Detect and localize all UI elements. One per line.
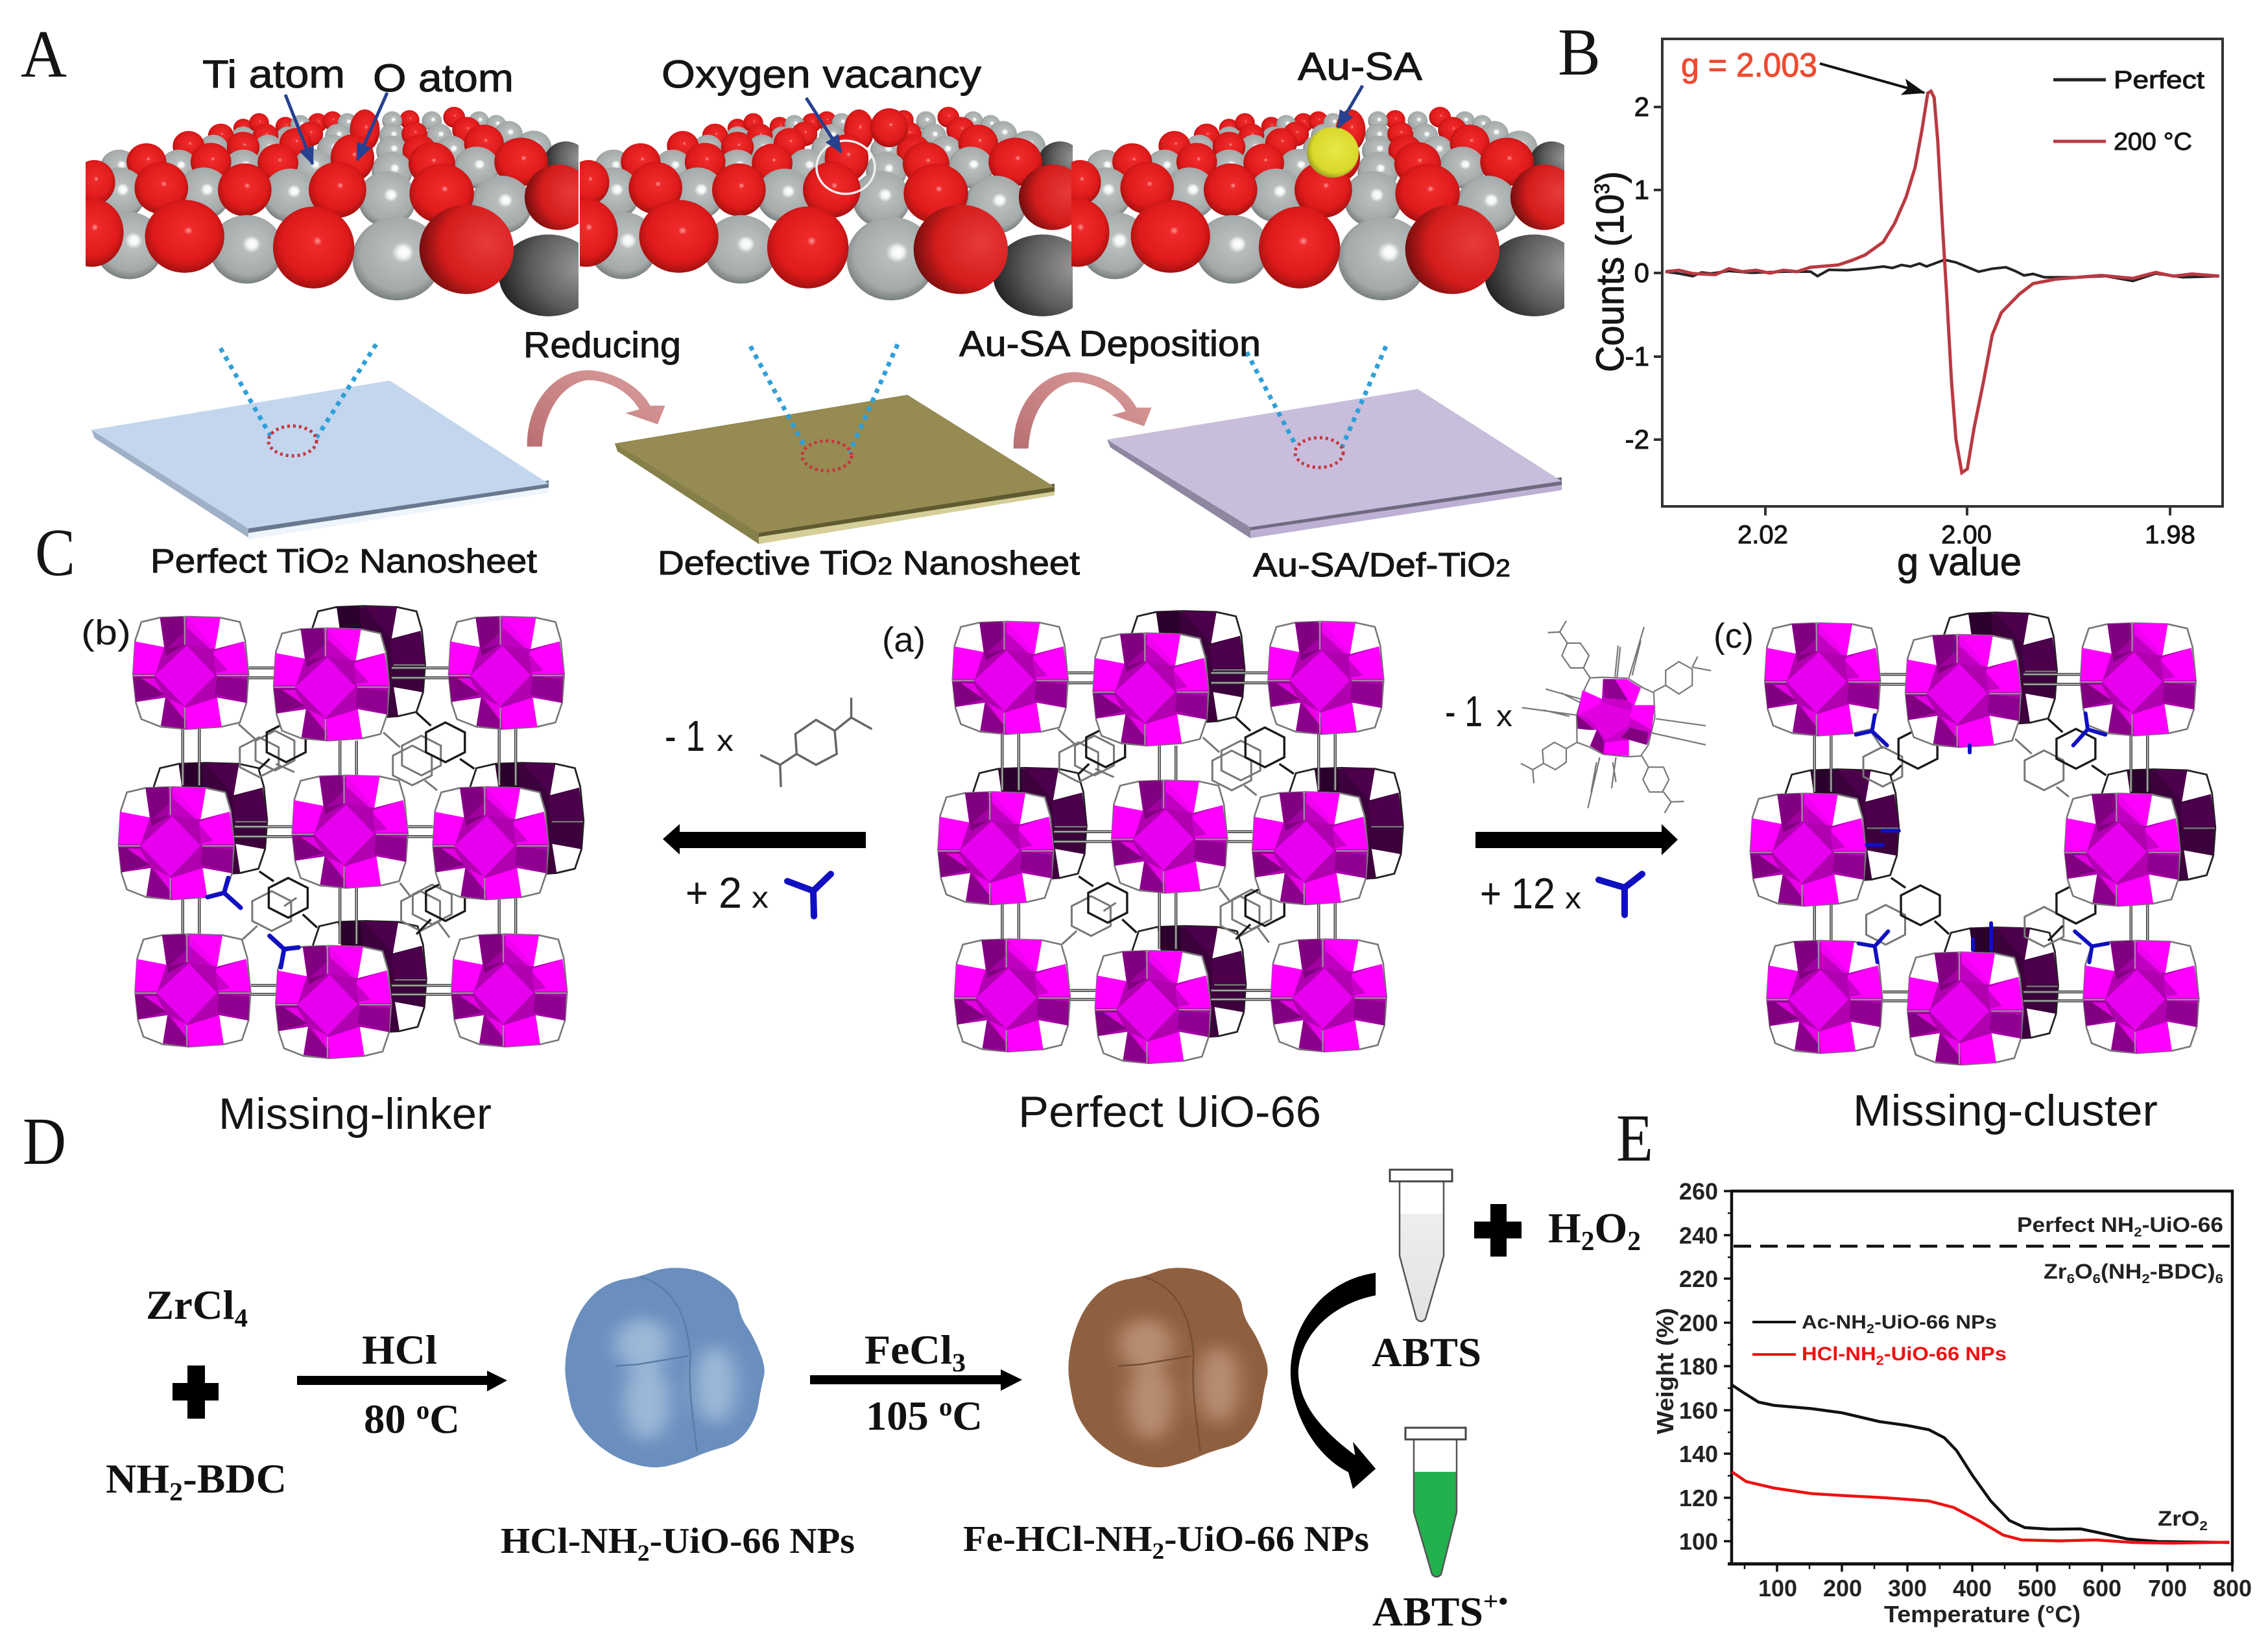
legend: HCl-NH2-UiO-66 NPs: 2 <box>1876 1354 1884 1368</box>
condition: FeCl3: 3 <box>952 1348 966 1377</box>
legend <box>2053 67 2205 156</box>
text: minus one cluster: x <box>1496 699 1512 733</box>
label: Zr6O6(NH2-BDC)6: -BDC) <box>2150 1260 2215 1283</box>
y tick labels: 140 <box>1679 1441 1718 1467</box>
label (a): (a) <box>882 621 925 659</box>
legend: Ac-NH2-UiO-66 NPs: 2 <box>1867 1322 1874 1336</box>
icon: blue modulator <box>1599 874 1642 915</box>
blue linkers in structure (c) <box>1856 713 2108 962</box>
label: Perfect UiO-66: Perfect UiO-66 <box>1018 1087 1321 1137</box>
x axis title: Temperature (°C) <box>1884 1601 2081 1627</box>
gold single atom <box>1307 127 1359 178</box>
legend: HCl-NH2-UiO-66 NPs <box>1752 1343 2007 1368</box>
dotted light cones and defect ellipses <box>221 344 1386 471</box>
label: Zr6O6(NH2-BDC)6: O <box>2075 1260 2093 1283</box>
chart axes and ticks <box>1724 1191 2234 1572</box>
label: Au-SA Deposition: Au-SA Deposition <box>959 323 1261 364</box>
curve: HCl-NH2-UiO-66 <box>1732 1472 2229 1543</box>
reagent: H2O2: 2 <box>1581 1227 1594 1257</box>
panel B: EPR chart <box>1558 15 2223 584</box>
x tick labels <box>1758 1575 2252 1602</box>
x tick labels: 700 <box>2148 1575 2187 1602</box>
y tick labels: 200 <box>1679 1310 1718 1336</box>
icon: single cluster with linkers <box>1521 621 1711 813</box>
y tick labels: 220 <box>1679 1266 1718 1292</box>
reagent: H2O2: H <box>1548 1205 1581 1252</box>
curved arrow: deposition <box>1014 372 1152 449</box>
condition: 105 C: 105 <box>866 1393 927 1439</box>
label: Au-SA: Au-SA <box>1298 45 1422 88</box>
label: Zr6O6(NH2-BDC)6: Zr <box>2044 1260 2064 1283</box>
plus sign <box>173 1365 219 1419</box>
y axis title: Counts (10 <box>1588 182 1632 372</box>
label (b): (b) <box>81 613 131 652</box>
x tick labels: 600 <box>2083 1575 2121 1602</box>
legend: Ac-NH2-UiO-66 NPs: -UiO-66 NPs <box>1874 1312 1997 1333</box>
text: plus twelve modulators: x <box>1565 881 1581 915</box>
label: ABTS: ABTS <box>1372 1330 1481 1375</box>
atom lattice: oxygen vacancy <box>555 107 1092 316</box>
label: Perfect NH2-UiO-66: 2 <box>2134 1225 2142 1240</box>
label: Oxygen vacancy: Oxygen vacancy <box>662 53 981 96</box>
label: Perfect TiO2 Nanosheet: Perfect TiO 2 Nanosheet <box>150 543 538 580</box>
y tick labels: 240 <box>1679 1222 1718 1249</box>
sheet: defective TiO2 <box>615 395 1055 544</box>
curve: 200 C <box>1665 91 2219 473</box>
arrow: to missing-linker <box>663 824 866 855</box>
dashed theoretical line <box>1734 1245 2230 1247</box>
y tick labels: 160 <box>1679 1397 1718 1424</box>
atom lattice: Au single atom <box>1046 107 1584 316</box>
structure (a): perfect UiO-66 <box>938 611 1403 1063</box>
panel A: TiO2 nanosheet atom models and sheets <box>21 17 1584 584</box>
y axis title: ) <box>1588 171 1632 183</box>
x tick labels: 800 <box>2213 1575 2252 1602</box>
label: Missing-linker: Missing-linker <box>219 1089 492 1139</box>
icon: blue modulator <box>787 874 831 916</box>
panel letter B: B <box>1558 15 1601 89</box>
label: Perfect NH2-UiO-66: -UiO-66 <box>2142 1213 2223 1236</box>
y axis title: 3 <box>1590 183 1614 194</box>
y tick labels: 260 <box>1679 1178 1718 1205</box>
annotation: g = 2.003: g = 2.003 <box>1681 47 1817 84</box>
plus sign <box>1474 1204 1522 1257</box>
annotation arrow <box>1820 64 1924 93</box>
condition: FeCl3: FeCl <box>865 1327 948 1373</box>
label: Fe-HCl-NH2-UiO-66 NPs: 2 <box>1152 1538 1164 1564</box>
panel letter D: D <box>23 1104 66 1179</box>
condition: HCl: HCl <box>362 1327 437 1373</box>
text: plus twelve modulators <box>1480 869 1581 918</box>
reagent: NH2-BDC: NH <box>106 1456 167 1502</box>
curved arrow: reducing <box>527 370 665 447</box>
label: Fe-HCl-NH2-UiO-66 NPs: Fe-HCl-NH <box>963 1519 1145 1559</box>
sheet: Au-SA/Def-TiO2 <box>1107 389 1562 538</box>
curve: Perfect <box>1665 260 2219 281</box>
blue replacement linkers <box>208 878 298 967</box>
text: minus one cluster: - 1 <box>1445 687 1483 736</box>
blue arrows to atoms <box>285 86 1363 164</box>
panel E: TGA chart <box>1616 1101 2252 1627</box>
y tick labels: 1 <box>1634 174 1649 205</box>
tube: ABTS <box>1390 1170 1452 1321</box>
y tick labels <box>1679 1178 1718 1555</box>
text: plus twelve modulators: 12 <box>1511 869 1555 918</box>
reagent: H2O2: 2 <box>1627 1227 1641 1257</box>
x tick labels: 2.00 <box>1941 521 1992 549</box>
text: plus two modulators: + <box>686 869 708 917</box>
legend: 200 °C <box>2114 128 2192 156</box>
chart frame and ticks <box>1654 39 2223 515</box>
raised oxygen atom and vacancy ring <box>817 108 908 194</box>
y tick labels: 120 <box>1679 1485 1718 1511</box>
x tick labels: 2.02 <box>1737 521 1788 549</box>
label: Zr6O6(NH2-BDC)6: (NH <box>2101 1260 2142 1283</box>
label: Ti atom: Ti atom <box>202 53 345 96</box>
panel C: UiO-66 defect structures <box>35 515 2215 1139</box>
y tick labels: 180 <box>1679 1353 1718 1380</box>
x tick labels: 300 <box>1888 1575 1927 1602</box>
x tick labels: 500 <box>2018 1575 2057 1602</box>
tube: ABTS radical, green <box>1405 1428 1466 1577</box>
structure (b): missing-linker <box>119 606 584 1058</box>
text: plus two modulators: 2 <box>719 869 742 917</box>
text: minus one linker: x <box>717 724 734 757</box>
legend: HCl-NH2-UiO-66 NPs: HCl-NH <box>1802 1343 1870 1365</box>
reagent: NH2-BDC: 2 <box>169 1477 183 1506</box>
curved catalytic arrow <box>1291 1273 1376 1489</box>
panel letter A: A <box>21 17 67 91</box>
x tick labels: 1.98 <box>2145 521 2195 549</box>
sheet: perfect TiO2 <box>91 381 549 539</box>
label: ZrO2: 2 <box>2199 1519 2208 1533</box>
y tick labels: -2 <box>1625 424 1649 455</box>
reagent: NH2-BDC: -BDC <box>183 1456 287 1502</box>
nanoparticle: brown Fe-HCl-NH2-UiO-66 <box>1068 1268 1268 1467</box>
y tick labels: -1 <box>1625 341 1649 372</box>
y axis title: Weight (%) <box>1652 1308 1678 1434</box>
legend: Ac-NH2-UiO-66 NPs <box>1752 1312 1997 1336</box>
text: plus twelve modulators: + <box>1480 869 1501 918</box>
x axis title: g value <box>1897 540 2022 584</box>
label: Zr6O6(NH2-BDC)6: 6 <box>2067 1272 2075 1286</box>
label: ABTS radical cation: +• <box>1483 1587 1508 1616</box>
condition: 105 C: o <box>939 1392 952 1421</box>
reagent: ZrCl4: ZrCl <box>146 1282 232 1328</box>
legend: HCl-NH2-UiO-66 NPs: -UiO-66 NPs <box>1884 1343 2007 1365</box>
curve: Ac-NH2-UiO-66 <box>1732 1385 2229 1543</box>
label: Zr6O6(NH2-BDC)6: 2 <box>2142 1272 2150 1286</box>
label (c): (c) <box>1713 617 1754 656</box>
y tick labels: 0 <box>1634 257 1649 288</box>
label: HCl-NH2-UiO-66 NPs: -UiO-66 NPs <box>650 1521 855 1561</box>
reagent: H2O2: O <box>1594 1205 1627 1252</box>
label: Fe-HCl-NH2-UiO-66 NPs: -UiO-66 NPs <box>1164 1519 1369 1559</box>
label: Missing-cluster: Missing-cluster <box>1853 1086 2158 1135</box>
text: plus two modulators: x <box>752 881 769 914</box>
label: ZrO2: ZrO <box>2158 1507 2195 1530</box>
y tick labels: 2 <box>1634 91 1649 122</box>
icon: BDC linker molecule <box>760 698 872 787</box>
label: HCl-NH2-UiO-66 NPs: 2 <box>638 1540 650 1566</box>
reaction arrow 1 <box>297 1371 507 1391</box>
x tick labels: 200 <box>1823 1575 1862 1602</box>
label: Reducing: Reducing <box>523 324 681 365</box>
condition: 80 C: 80 <box>364 1397 405 1442</box>
reaction arrow 2 <box>810 1369 1022 1391</box>
label: Zr6O6(NH2-BDC)6: 6 <box>2093 1272 2101 1286</box>
panel letter E: E <box>1616 1101 1653 1176</box>
condition: 105 C: C <box>952 1393 983 1439</box>
legend: Ac-NH2-UiO-66 NPs: Ac-NH <box>1802 1312 1861 1333</box>
condition: 80 C: o <box>416 1395 429 1424</box>
nanoparticle: blue HCl-NH2-UiO-66 <box>565 1268 765 1467</box>
x tick labels <box>1737 521 2195 549</box>
label: Perfect NH2-UiO-66: Perfect NH <box>2017 1213 2123 1236</box>
label: O atom: O atom <box>373 56 514 100</box>
label: Defective TiO2 Nanosheet: Defective TiO 2 Nanosheet <box>658 545 1080 582</box>
y tick labels: 100 <box>1679 1528 1718 1555</box>
panel D: synthesis scheme <box>23 1104 1641 1635</box>
atom lattice: perfect TiO2 <box>60 107 598 316</box>
reagent: ZrCl4: 4 <box>234 1303 248 1332</box>
label: Au-SA/Def-TiO2: Au-SA/Def-TiO 2 <box>1253 547 1510 584</box>
panel letter C: C <box>35 515 75 590</box>
x tick labels: 100 <box>1758 1575 1797 1602</box>
text: plus two modulators <box>686 869 769 917</box>
label: Zr6O6(NH2-BDC)6: 6 <box>2215 1272 2223 1286</box>
label: HCl-NH2-UiO-66 NPs: HCl-NH <box>501 1521 632 1561</box>
text: minus one linker: - 1 <box>665 712 705 761</box>
condition: 80 C: C <box>429 1397 460 1442</box>
legend: Perfect <box>2114 67 2205 94</box>
arrow: to missing-cluster <box>1475 824 1678 855</box>
structure (c): missing-cluster <box>1750 613 2215 1065</box>
y tick labels <box>1625 91 1649 455</box>
label: ABTS radical cation: ABTS <box>1372 1589 1479 1635</box>
x tick labels: 400 <box>1953 1575 1992 1602</box>
